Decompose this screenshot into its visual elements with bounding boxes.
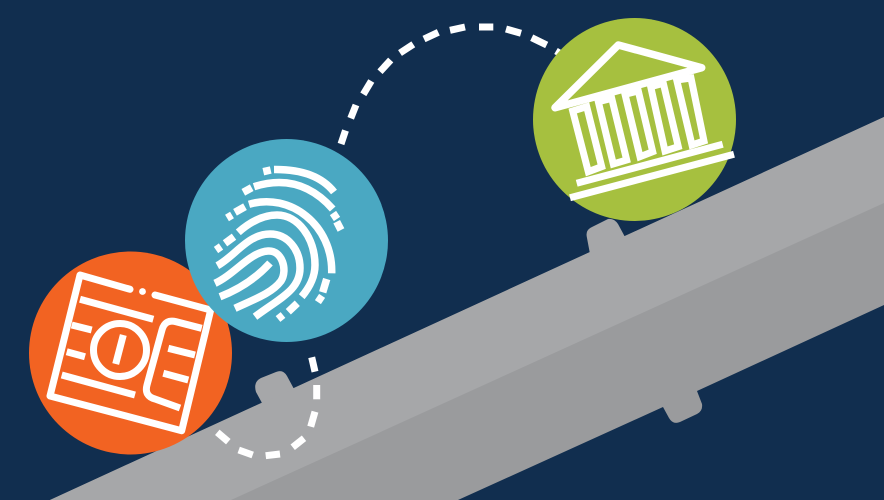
icon: fingerprint [215, 169, 341, 319]
pipe dark lower body [50, 117, 884, 500]
orange circle [29, 252, 232, 454]
icon: bank building [555, 45, 734, 198]
pipe lower flange bump [255, 371, 294, 403]
dashed arc: upper [341, 27, 568, 144]
dashed arc: lower [217, 357, 317, 456]
blue circle with fingerprint icon [185, 139, 388, 342]
green circle [533, 18, 736, 221]
pipe light upper band [50, 117, 884, 500]
green circle with bank icon [533, 18, 736, 221]
icon: chip card [50, 275, 211, 431]
sloped pipe with flange bumps [50, 117, 884, 500]
blue circle [185, 139, 388, 342]
orange circle with chip card icon [29, 252, 232, 454]
pipe upper flange bump [587, 219, 625, 254]
